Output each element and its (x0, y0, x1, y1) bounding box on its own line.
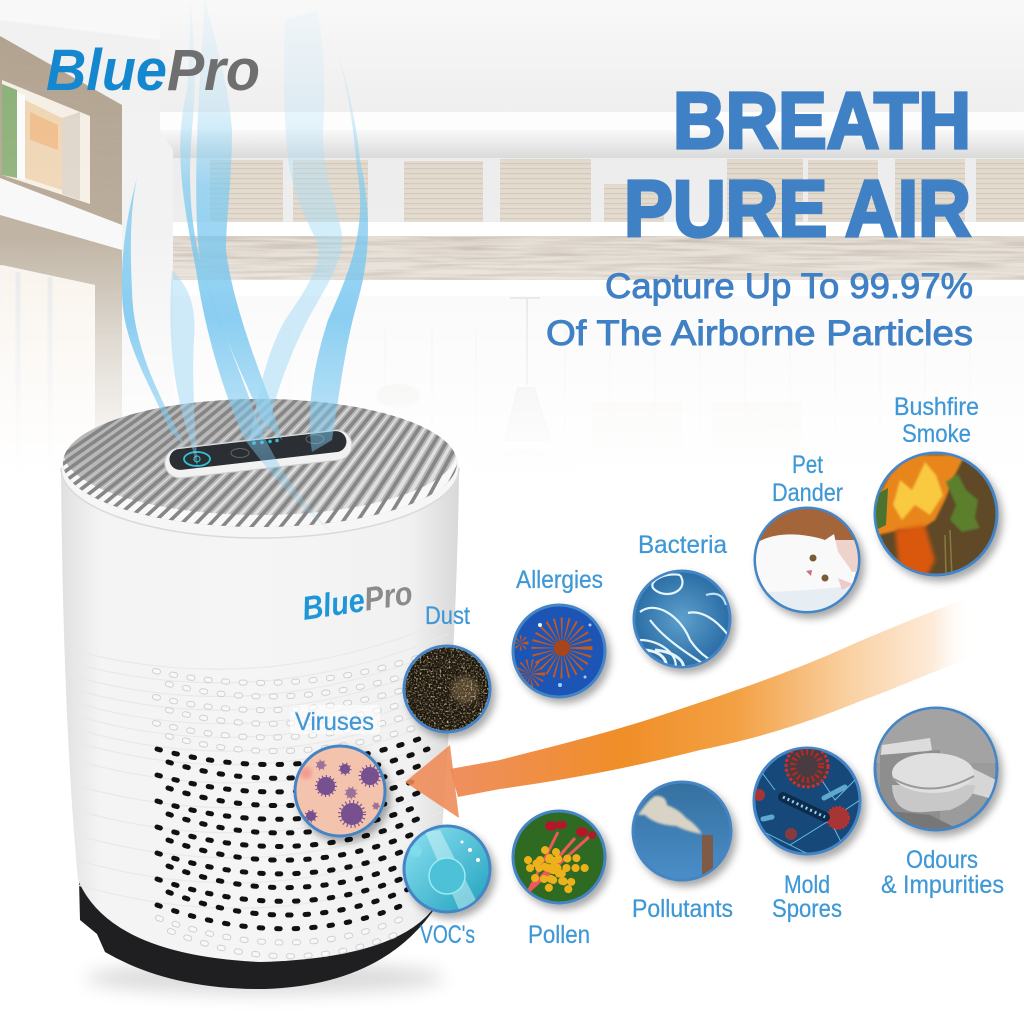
particle: allergies (513, 566, 605, 697)
particle: pollen (513, 811, 605, 949)
particle: bacteria: Bacteria (638, 531, 727, 559)
air flow wisps (122, 0, 368, 533)
particle: viruses: Viruses (295, 708, 374, 736)
body logo: BluePro (300, 574, 415, 627)
particle: bushfire smoke (875, 393, 997, 580)
subtitle (546, 267, 973, 353)
ground shadow under purifier (85, 962, 445, 994)
particle: mold spores: Mold (784, 871, 830, 899)
particle: bushfire smoke: Bushfire (894, 393, 979, 421)
particle: pet dander: Dander (772, 479, 843, 507)
particle: bacteria (634, 531, 730, 672)
purifier base (79, 880, 437, 989)
particle: pollen: Pollen (528, 921, 590, 949)
top rim (61, 399, 459, 538)
particle: pet dander (755, 451, 860, 615)
title: BREATH (673, 76, 971, 165)
air outlet fins (63, 399, 457, 527)
control panel (163, 428, 353, 480)
particle: pollutants (632, 782, 733, 923)
particle: viruses (295, 708, 385, 836)
title (624, 76, 971, 253)
subtitle: Capture Up To 99.97% (605, 267, 973, 306)
particle: allergies: Allergies (516, 566, 603, 594)
particle: odours and impurities (875, 708, 1004, 899)
ribbed vent lines (72, 620, 448, 908)
logo: BluePro (46, 38, 260, 103)
particle: odours and impurities: Odours (906, 846, 978, 874)
particle: mold spores (753, 745, 860, 923)
particle: mold spores: Spores (772, 895, 842, 923)
particle: VOCs (404, 826, 490, 949)
background: blurred room interior (0, 10, 1024, 428)
subtitle: Of The Airborne Particles (546, 314, 973, 353)
particle: dust (404, 602, 490, 732)
particle: VOCs: VOC's (420, 921, 475, 949)
title: PURE AIR (624, 164, 971, 253)
particle: pollutants: Pollutants (632, 895, 733, 923)
particle: odours and impurities: & Impurities (881, 871, 1004, 899)
purifier unit (60, 399, 460, 989)
particle: pet dander: Pet (792, 451, 823, 479)
viruses label backing (290, 705, 380, 734)
pale closed vent holes (155, 652, 435, 956)
particle: bushfire smoke: Smoke (902, 420, 971, 448)
open vent holes (157, 735, 430, 929)
particle: dust: Dust (425, 602, 470, 630)
purifier body (61, 466, 459, 962)
orange intake arrow (405, 595, 975, 818)
